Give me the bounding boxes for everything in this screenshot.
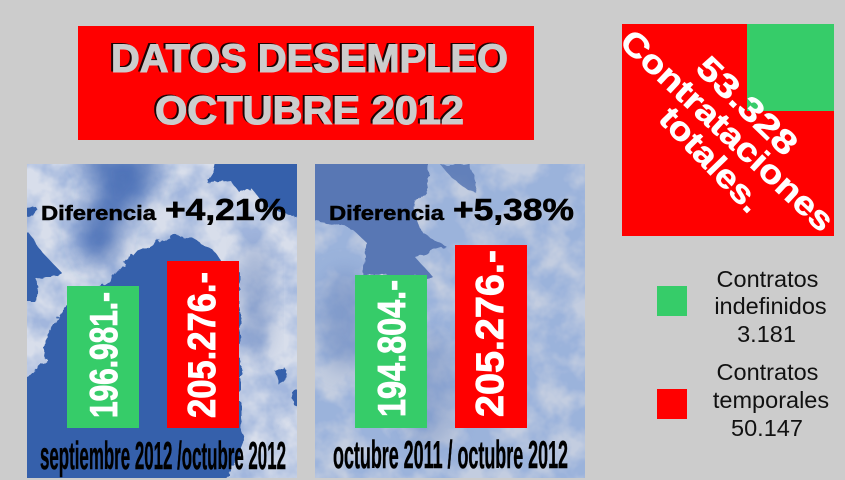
legend: contratos temporales — [657, 359, 829, 441]
difference label right: +5,38% — [453, 192, 574, 227]
total label line 2: totales. — [652, 99, 770, 220]
bar: septiembre temporales: 205.276.- — [181, 272, 224, 418]
total label line 1: Contrataciones — [613, 22, 842, 239]
bar: octubre 2011 indefinidos — [355, 275, 427, 428]
bar: septiembre indefinidos: 196.981.- — [83, 292, 126, 418]
difference label right: Diferencia — [329, 203, 445, 225]
legend: contratos temporales: temporales — [713, 387, 829, 413]
difference label left: Diferencia — [41, 203, 157, 225]
title banner — [78, 26, 534, 140]
bar: septiembre temporales — [167, 261, 239, 428]
bar: octubre 2011 indefinidos: 194.804.- — [371, 280, 414, 417]
legend: contratos temporales: Contratos — [717, 359, 818, 385]
difference label left: +4,21% — [165, 192, 286, 227]
text: octubre 2011 / octubre 2012 — [333, 434, 568, 477]
legend: contratos indefinidos — [657, 266, 827, 347]
panel: septiembre 2012 / octubre 2012 — [20, 150, 304, 480]
panel: octubre 2011 / octubre 2012 — [308, 158, 585, 478]
difference label left — [41, 192, 286, 227]
bar: octubre 2012 temporales: 205.276.- — [469, 250, 512, 417]
difference label right — [329, 192, 574, 227]
title line 1: DATOS DESEMPLEO — [109, 36, 506, 80]
legend: contratos indefinidos: indefinidos — [714, 293, 827, 319]
title line 1: DATOS DESEMPLEO — [111, 37, 508, 81]
title line 2: OCTUBRE 2012 — [155, 89, 464, 133]
legend: contratos temporales: 50.147 — [731, 415, 803, 441]
chart: contract share square — [613, 22, 842, 239]
legend: contratos indefinidos: 3.181 — [737, 321, 796, 347]
bar: septiembre indefinidos — [67, 286, 139, 428]
total figure: 53.328 — [689, 48, 805, 163]
sky photo left — [20, 150, 304, 480]
legend: contratos indefinidos: Contratos — [717, 266, 818, 292]
bar: octubre 2012 temporales — [455, 245, 527, 428]
title line 2: OCTUBRE 2012 — [153, 88, 462, 132]
sky photo right — [308, 158, 585, 478]
text: septiembre 2012 /octubre 2012 — [40, 435, 286, 478]
